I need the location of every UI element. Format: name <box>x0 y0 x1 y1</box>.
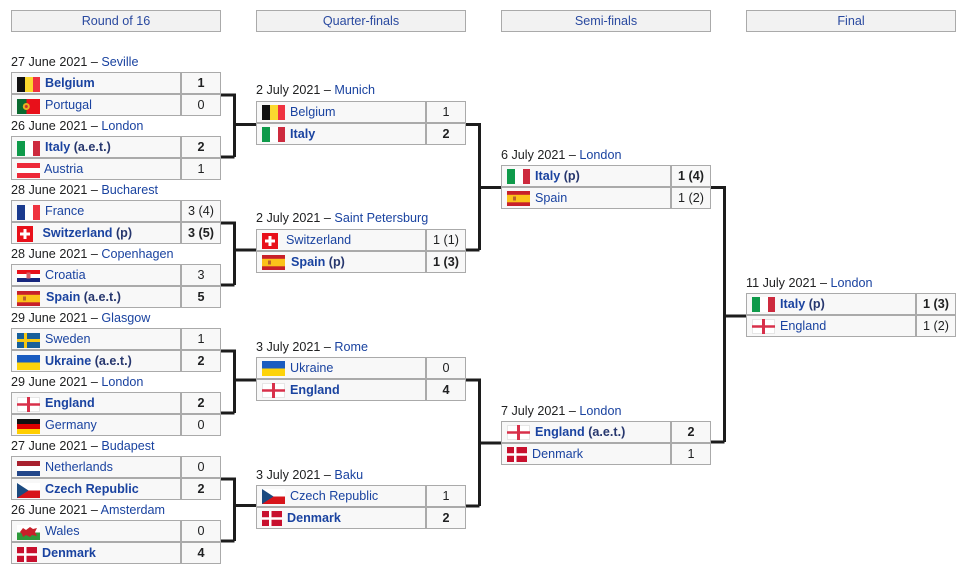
match: Netherlands v Czech Republic <box>11 439 220 500</box>
row: Spain 1 (3) <box>256 252 466 272</box>
row: Spain 5: 5 <box>197 290 205 304</box>
match: England v Germany <box>11 375 220 436</box>
row: Belgium 1: 1 <box>442 105 450 119</box>
flag: Wales <box>17 525 40 540</box>
flag: Czech Republic <box>262 489 285 504</box>
match: Switzerland v Spain <box>256 211 466 272</box>
flag: Denmark <box>262 511 282 526</box>
heading: Semi-finals: Semi-finals <box>575 14 637 28</box>
flag: Netherlands <box>17 461 40 476</box>
row: England 2: England (a.e.t.) <box>535 425 625 439</box>
flag: Switzerland <box>17 226 33 242</box>
row: Czech Republic 1: 1 <box>442 489 450 503</box>
flag: Belgium <box>262 105 285 120</box>
flag: Denmark <box>507 447 527 462</box>
heading: Final <box>746 10 956 32</box>
row: England 4 <box>256 380 466 400</box>
heading: Final: Final <box>837 14 865 28</box>
flag: Spain <box>262 255 285 270</box>
date and venue: 29 June 2021 – London <box>11 375 143 389</box>
row: Czech Republic 1 <box>256 486 466 506</box>
row: Ukraine 0 <box>256 358 466 378</box>
row: Ukraine 0: 0 <box>442 361 450 375</box>
row: Italy 1 (4): 1 (4) <box>678 169 704 183</box>
row: Denmark 2: 2 <box>442 511 450 525</box>
flag: France <box>17 205 40 220</box>
row: Sweden 1: 1 <box>197 332 205 346</box>
row: Switzerland 3 (5): 3 (5) <box>188 226 214 240</box>
date and venue: 11 July 2021 – London <box>746 276 873 290</box>
row: Ukraine 0: Ukraine <box>290 361 333 375</box>
row: Denmark 1: Denmark <box>532 447 584 461</box>
flag: England <box>507 425 530 440</box>
row: Belgium 1 <box>256 102 466 122</box>
match: Final, Italy v England <box>746 276 956 336</box>
date and venue: 3 July 2021 – Rome <box>256 340 368 354</box>
row: Portugal 0: Portugal <box>45 98 92 112</box>
flag: Ukraine <box>262 361 285 376</box>
row: Spain 1 (2) <box>502 188 710 208</box>
row: Portugal 0 <box>12 94 220 116</box>
row: Austria 1: 1 <box>197 162 205 176</box>
row: Germany 0: Germany <box>45 418 97 432</box>
row: Ukraine 2: Ukraine (a.e.t.) <box>45 354 132 368</box>
row: Switzerland 1 (1) <box>256 230 466 250</box>
date and venue: 27 June 2021 – Seville <box>11 55 138 69</box>
row: Italy 1 (4) <box>502 166 710 186</box>
row: Wales 0: 0 <box>197 524 205 538</box>
row: Italy 2 <box>256 124 466 144</box>
row: France 3 (4): France <box>45 204 84 218</box>
flag: Italy <box>262 127 285 142</box>
row: England 2 <box>12 392 220 414</box>
flag: Germany <box>17 419 40 434</box>
date and venue: 26 June 2021 – London <box>11 119 143 133</box>
bracket connectors <box>221 95 746 541</box>
date and venue: 6 July 2021 – London <box>501 148 621 162</box>
row: England 1 (2): 1 (2) <box>923 319 949 333</box>
row: Croatia 3 <box>12 264 220 286</box>
flag: Spain <box>507 191 530 206</box>
row: England 4: England <box>290 383 340 397</box>
row: Netherlands 0: 0 <box>197 460 205 474</box>
row: Austria 1: Austria <box>44 162 83 176</box>
flag: Belgium <box>17 77 40 92</box>
match: Sweden v Ukraine <box>11 311 220 372</box>
row: Italy 1 (3) <box>746 294 956 314</box>
row: Spain 5 <box>12 286 220 308</box>
row: Netherlands 0 <box>12 456 220 478</box>
date and venue: 28 June 2021 – Copenhagen <box>11 247 173 261</box>
date and venue: 29 June 2021 – Glasgow <box>11 311 151 325</box>
row: Italy 1 (4): Italy (p) <box>535 169 580 183</box>
flag: Portugal <box>17 99 40 114</box>
row: Belgium 1: Belgium <box>290 105 336 119</box>
match: England v Denmark <box>501 404 710 464</box>
date and venue: 3 July 2021 – Baku <box>256 468 363 482</box>
row: Switzerland 3 (5) <box>12 222 220 244</box>
row: Italy 2: Italy (a.e.t.) <box>45 140 111 154</box>
row: Austria 1 <box>12 158 220 180</box>
row: France 3 (4): 3 (4) <box>188 204 214 218</box>
row: England 2: England <box>45 396 95 410</box>
row: Denmark 4: Denmark <box>42 546 97 560</box>
row: Spain 1 (2): 1 (2) <box>678 191 704 205</box>
heading: Quarter-finals: Quarter-finals <box>323 14 399 28</box>
row: Sweden 1 <box>12 328 220 350</box>
flag: Austria <box>17 163 40 178</box>
row: Wales 0 <box>12 520 220 542</box>
heading: Round of 16: Round of 16 <box>82 14 150 28</box>
row: England 2: 2 <box>197 396 205 410</box>
row: Denmark 2 <box>256 508 466 528</box>
date and venue: 2 July 2021 – Saint Petersburg <box>256 211 428 225</box>
row: France 3 (4) <box>12 200 220 222</box>
row: Denmark 4: 4 <box>197 546 205 560</box>
row: Italy 2 <box>12 136 220 158</box>
row: Belgium 1: Belgium <box>45 76 95 90</box>
flag: Italy <box>752 297 775 312</box>
match: France v Switzerland <box>11 183 220 244</box>
row: Sweden 1: Sweden <box>45 332 91 346</box>
row: Italy 1 (3): 1 (3) <box>923 297 949 311</box>
match: Ukraine v England <box>256 340 466 400</box>
row: Croatia 3: Croatia <box>45 268 86 282</box>
row: Spain 5: Spain (a.e.t.) <box>46 290 121 304</box>
row: Belgium 1 <box>12 72 220 94</box>
row: Spain 1 (3): Spain (p) <box>291 255 345 269</box>
date and venue: 26 June 2021 – Amsterdam <box>11 503 165 517</box>
row: Czech Republic 1: Czech Republic <box>290 489 378 503</box>
row: Denmark 1: 1 <box>687 447 695 461</box>
match: Belgium v Italy <box>256 83 466 144</box>
row: England 1 (2): England <box>780 319 826 333</box>
row: Spain 1 (3): 1 (3) <box>433 255 459 269</box>
row: Germany 0: 0 <box>197 418 205 432</box>
heading: Semi-finals <box>502 10 710 32</box>
row: Portugal 0: 0 <box>197 98 205 112</box>
match: Belgium v Portugal <box>11 55 220 116</box>
row: Italy 2: Italy <box>290 127 315 141</box>
flag: England <box>262 383 285 398</box>
match: Croatia v Spain <box>11 247 220 308</box>
flag: Czech Republic <box>17 483 40 498</box>
round headers <box>12 10 956 32</box>
flag: Italy <box>17 141 40 156</box>
row: Croatia 3: 3 <box>197 268 205 282</box>
row: Italy 1 (3): Italy (p) <box>780 297 825 311</box>
row: Switzerland 1 (1): Switzerland <box>286 233 351 247</box>
flag: Sweden <box>17 333 40 348</box>
row: Czech Republic 2: 2 <box>197 482 205 496</box>
row: England 1 (2) <box>746 316 956 336</box>
row: Czech Republic 2 <box>12 478 220 500</box>
row: Ukraine 2: 2 <box>197 354 205 368</box>
heading: Round of 16 <box>12 10 220 32</box>
row: Italy 2: 2 <box>442 127 450 141</box>
date and venue: 28 June 2021 – Bucharest <box>11 183 159 197</box>
row: Italy 2: 2 <box>197 140 205 154</box>
flag: England <box>17 397 40 412</box>
row: Denmark 1 <box>502 444 710 464</box>
row: Czech Republic 2: Czech Republic <box>45 482 139 496</box>
row: Germany 0 <box>12 414 220 436</box>
match: Czech Republic v Denmark <box>256 468 466 528</box>
row: England 4: 4 <box>442 383 450 397</box>
row: Denmark 2: Denmark <box>287 511 342 525</box>
row: Spain 1 (2): Spain <box>535 191 567 205</box>
flag: Ukraine <box>17 355 40 370</box>
match: Italy v Austria <box>11 119 220 180</box>
flag: Spain <box>17 291 40 306</box>
flag: Denmark <box>17 547 37 562</box>
flag: Croatia <box>17 270 40 282</box>
flag: Italy <box>507 169 530 184</box>
match: Italy v Spain <box>501 148 710 208</box>
row: Switzerland 1 (1): 1 (1) <box>433 233 459 247</box>
row: Switzerland 3 (5): Switzerland (p) <box>42 226 132 240</box>
row: England 2 <box>502 422 710 442</box>
row: Ukraine 2 <box>12 350 220 372</box>
row: Wales 0: Wales <box>45 524 80 538</box>
row: Netherlands 0: Netherlands <box>45 460 113 474</box>
date and venue: 7 July 2021 – London <box>501 404 621 418</box>
match: Wales v Denmark <box>11 503 220 564</box>
date and venue: 27 June 2021 – Budapest <box>11 439 155 453</box>
flag: Switzerland <box>262 233 278 249</box>
date and venue: 2 July 2021 – Munich <box>256 83 375 97</box>
row: England 2: 2 <box>687 425 695 439</box>
row: Belgium 1: 1 <box>197 76 205 90</box>
flag: England <box>752 319 775 334</box>
row: Denmark 4 <box>12 542 220 564</box>
heading: Quarter-finals <box>256 10 466 32</box>
